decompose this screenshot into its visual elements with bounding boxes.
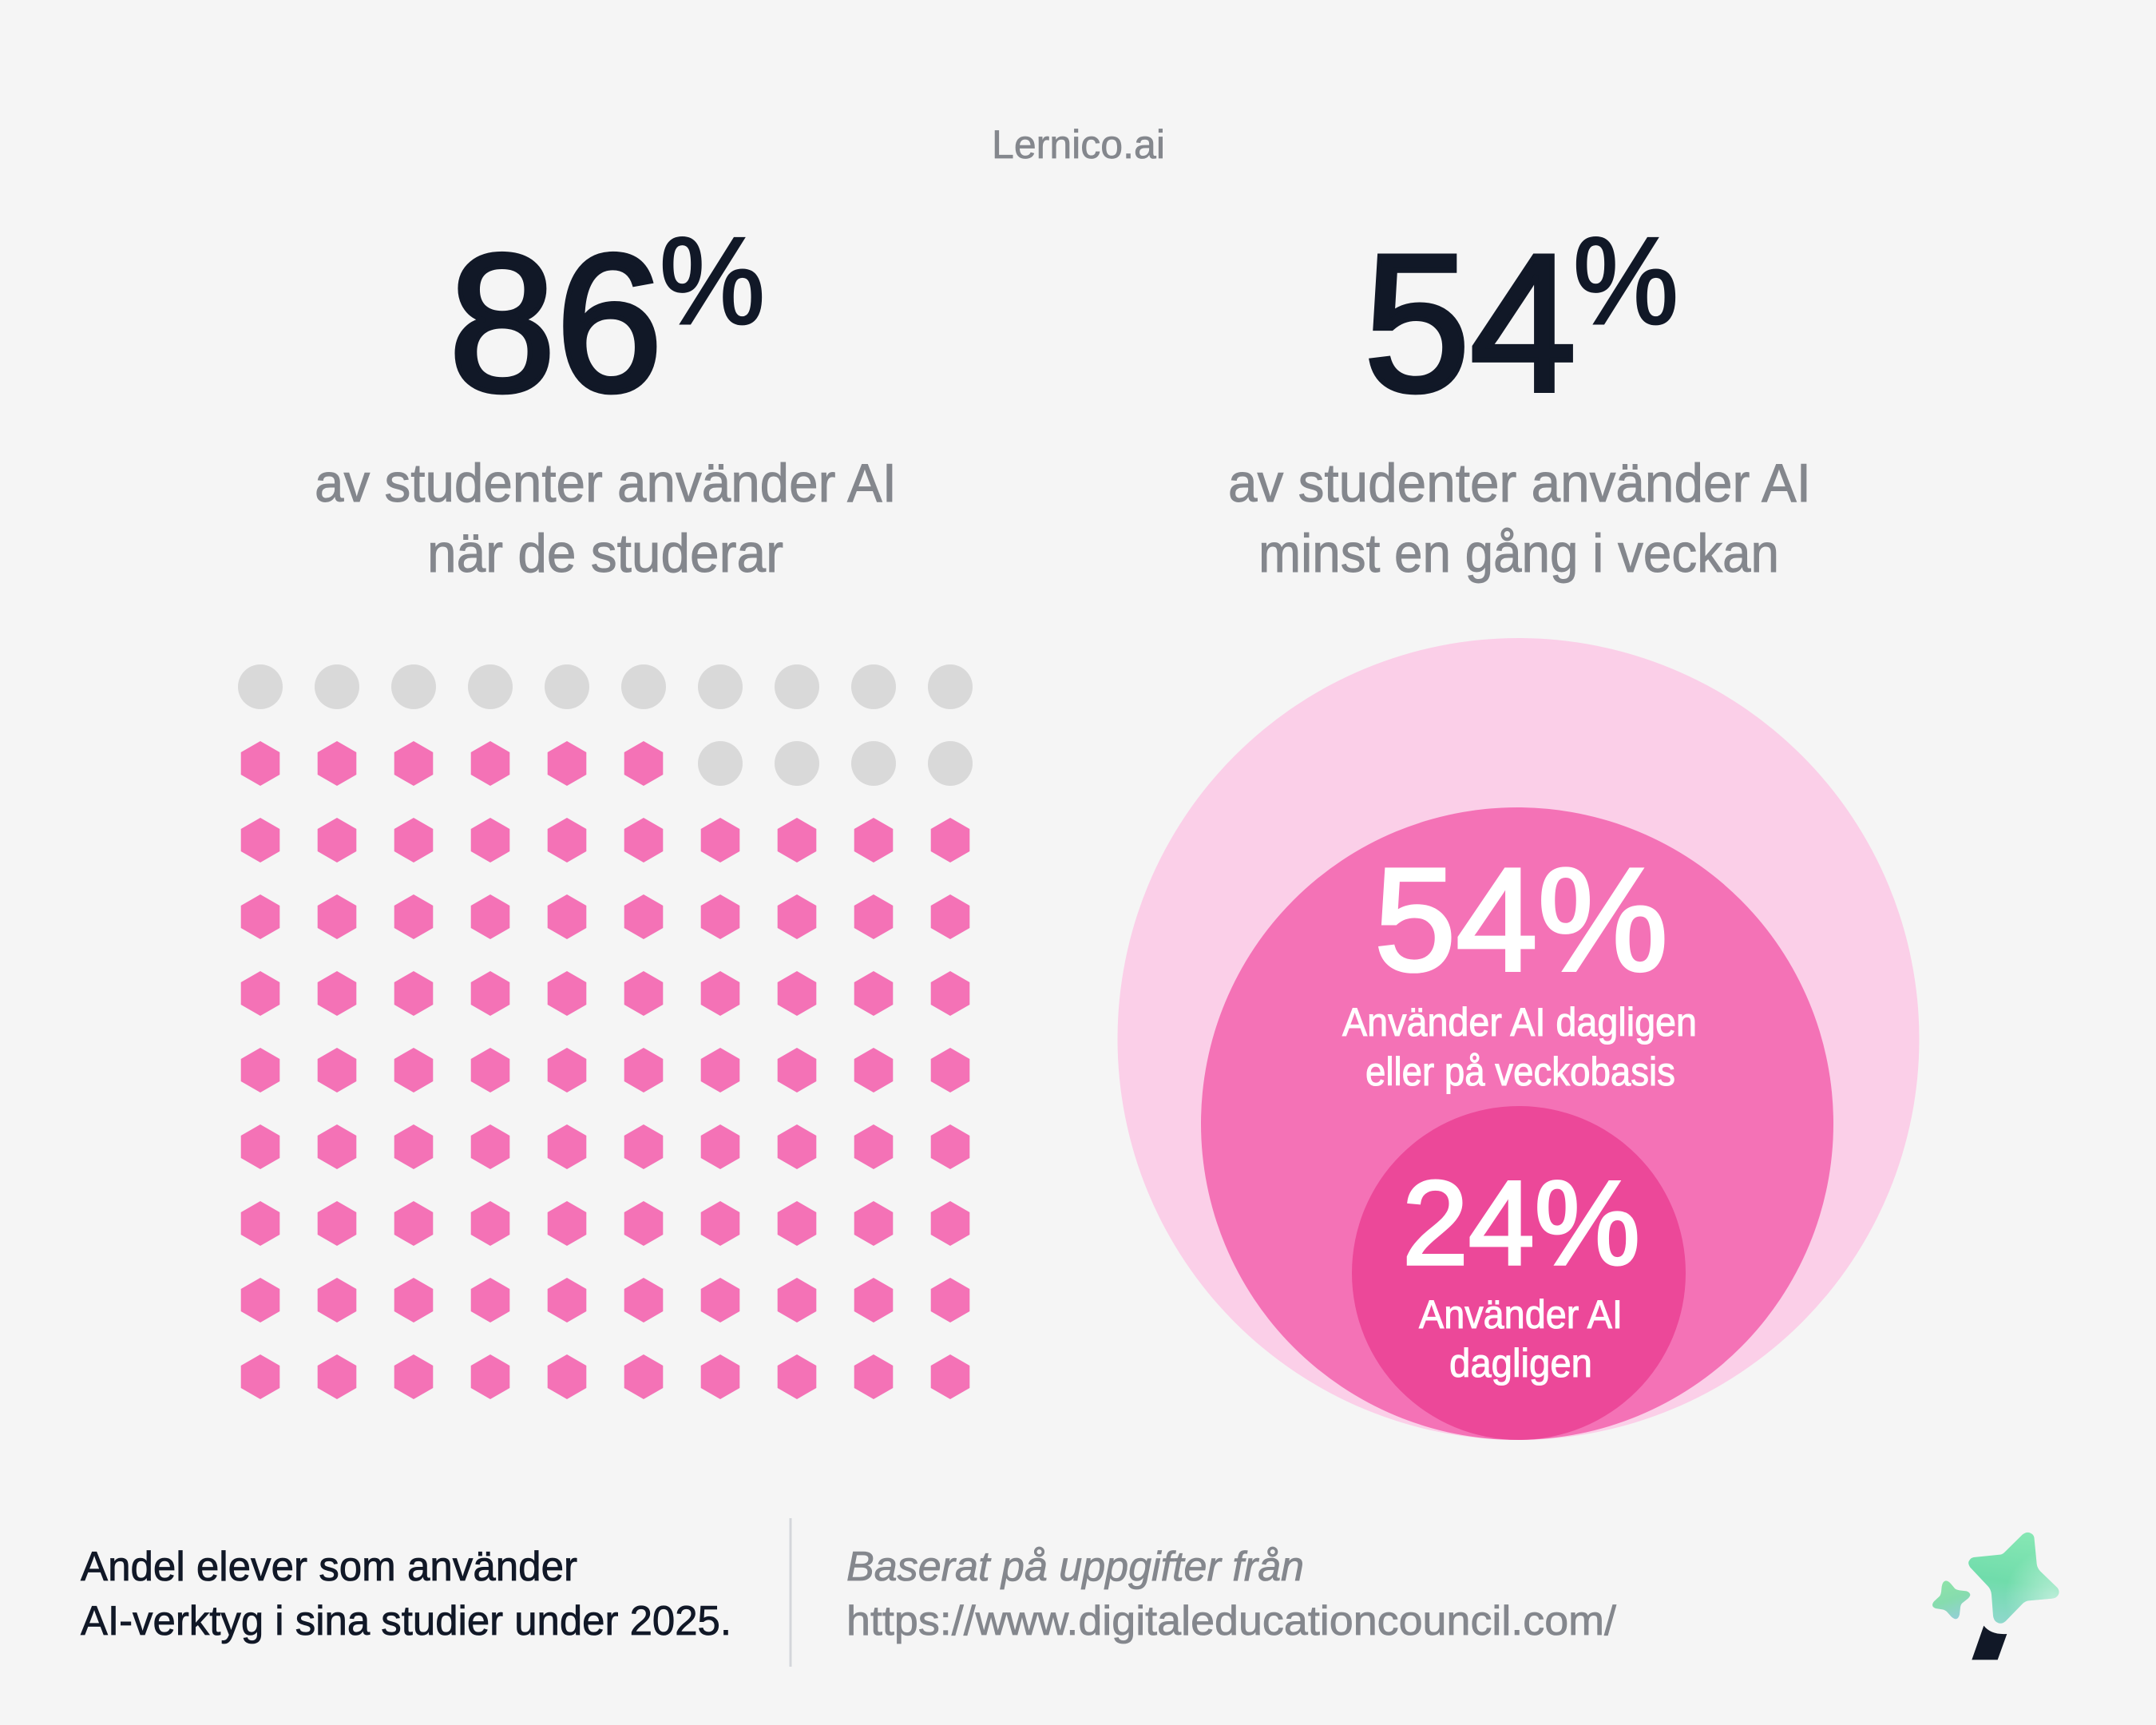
middle circle: 54% — [1201, 807, 1833, 1440]
footer title — [81, 1544, 731, 1644]
big star — [1968, 1533, 2059, 1624]
footer title: AI-verktyg i sina studier under 2025. — [81, 1598, 731, 1644]
big number 54%: % — [1573, 212, 1678, 350]
big number 54% — [1364, 212, 1678, 432]
chart: nested circles — [1118, 638, 1920, 1440]
caption: weekly or daily use: Använder AI dagligen — [1342, 1000, 1697, 1045]
left description: när de studerar — [427, 523, 783, 584]
left description: av studenter använder AI — [315, 453, 897, 514]
caption: daily use — [1419, 1292, 1623, 1386]
pink hexagons: AI users — [241, 741, 969, 1399]
right description: av studenter använder AI — [1228, 453, 1811, 514]
big number 86%: 86 — [449, 213, 663, 432]
footer source — [846, 1544, 1617, 1644]
grey dots: non-users — [238, 664, 973, 786]
panel: right statistic 54% — [1228, 212, 1811, 584]
big number 54%: 54 — [1364, 213, 1576, 432]
chart: dot grid 86 of 100 — [238, 664, 973, 1399]
brand name: Lernico.ai — [992, 122, 1165, 167]
label 54%: 54% — [1374, 837, 1668, 1001]
panel: left statistic 86% — [315, 212, 897, 584]
footer title: Andel elever som använder — [81, 1544, 577, 1590]
caption: weekly or daily use: eller på veckobasis — [1365, 1049, 1675, 1094]
label 24%: 24% — [1402, 1156, 1640, 1290]
left description — [315, 453, 897, 584]
caption: daily use: dagligen — [1449, 1341, 1592, 1386]
big number 86% — [449, 212, 765, 432]
small star — [1932, 1580, 1970, 1619]
wand handle — [1972, 1626, 2007, 1660]
right description: minst en gång i veckan — [1258, 523, 1779, 584]
big number 86%: % — [660, 212, 765, 350]
footer source: Baserat på uppgifter från — [846, 1544, 1304, 1590]
caption: weekly or daily use — [1342, 1000, 1697, 1094]
caption: daily use: Använder AI — [1419, 1292, 1623, 1337]
right description — [1228, 453, 1811, 584]
outer circle: 86% — [1118, 638, 1920, 1440]
icon: logo stars and wand — [1932, 1533, 2059, 1660]
footer source: https://www.digitaleducationcouncil.com/ — [846, 1598, 1617, 1644]
inner circle: 24% — [1352, 1106, 1686, 1440]
